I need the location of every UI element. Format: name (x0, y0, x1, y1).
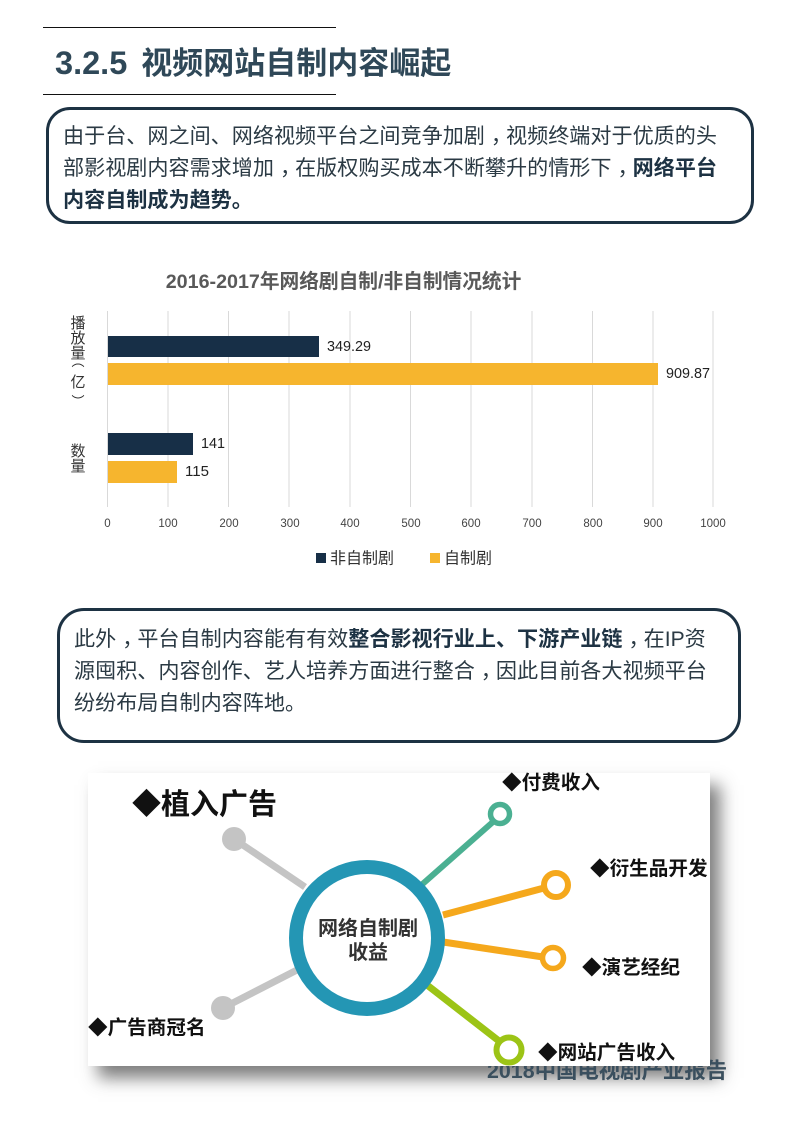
category label: quantity: 数 (70, 443, 86, 460)
callout: industry chain integration: 此外 ，平台自制内容能有有效整合影视行业上、下游产业链 ，在IP资 (74, 628, 706, 651)
central hub: 网络自制剧 (318, 916, 418, 940)
legend (316, 550, 492, 568)
revenue diagram (88, 771, 708, 1066)
bars: play count (108, 336, 710, 385)
callout: industry chain integration (57, 608, 741, 743)
branch: sponsor naming (88, 970, 297, 1039)
bars: quantity: 141 (201, 436, 225, 452)
bars: play count: 349.29 (327, 339, 371, 355)
legend: 自制剧 (444, 550, 492, 568)
x axis tick labels: 200 (219, 518, 239, 530)
central hub (296, 867, 438, 1009)
x axis tick labels: 400 (340, 518, 360, 530)
x axis tick labels: 900 (643, 518, 663, 530)
x axis tick labels: 500 (401, 518, 421, 530)
x axis tick labels: 600 (461, 518, 481, 530)
callout: industry chain integration: 源囤积、内容创作、艺人培养方面进行整合 ，因此目前各大视频平台 (74, 660, 707, 683)
x axis tick labels: 0 (104, 518, 111, 530)
x axis tick labels: 100 (158, 518, 178, 530)
branch: derivative products (443, 857, 708, 915)
category label: quantity (70, 443, 86, 475)
callout: self-produced content trend: 内容自制成为趋势。 (63, 189, 253, 212)
bars: quantity (108, 433, 225, 483)
category label: play count: ︵ (71, 354, 85, 369)
callout: self-produced content trend: 部影视剧内容需求增加 ，在版权购买成本不断攀升的情形下 ，网络平台 (63, 157, 717, 180)
x axis tick labels: 1000 (700, 518, 726, 530)
category label: quantity: 量 (70, 458, 86, 475)
x axis tick labels: 800 (583, 518, 603, 530)
legend: 非自制剧 (330, 550, 394, 568)
branch: derivative products: ◆衍生品开发 (590, 857, 708, 880)
x axis tick labels: 300 (280, 518, 300, 530)
category label: play count: 放 (70, 330, 86, 347)
x axis tick labels (104, 518, 726, 530)
category label: play count: 亿 (70, 374, 86, 391)
source caption: 2018中国电视剧产业报告 (487, 1059, 727, 1083)
callout: industry chain integration: 纷纷布局自制内容阵地。 (74, 692, 306, 715)
chart title: 2016-2017年网络剧自制/非自制情况统计 (166, 270, 522, 293)
revenue diagram panel (88, 773, 710, 1066)
branch: paid revenue (418, 771, 600, 888)
category label: play count: 量 (70, 345, 86, 362)
diagram drop shadow (88, 773, 710, 1066)
branch: product placement: ◆植入广告 (132, 788, 277, 821)
category label: play count: ︶ (71, 394, 85, 409)
category label: play count: 播 (70, 315, 86, 332)
branch: paid revenue: ◆付费收入 (502, 771, 600, 794)
x axis tick labels: 700 (522, 518, 542, 530)
branch: talent agency (443, 942, 680, 979)
category label: play count (70, 315, 86, 409)
branch: website ad revenue: ◆网站广告收入 (538, 1041, 676, 1064)
bar chart: 2016-2017 self-produced vs non-self-produced (70, 270, 726, 568)
branch: talent agency: ◆演艺经纪 (582, 956, 680, 979)
bars: play count: 909.87 (666, 366, 710, 382)
callout: self-produced content trend: 由于台、网之间、网络视频平台之间竞争加剧 ，视频终端对于优质的头 (63, 125, 717, 148)
heading: 3.2.5 视频网站自制内容崛起 (55, 45, 451, 81)
bars: quantity: 115 (185, 464, 209, 480)
branch: sponsor naming: ◆广告商冠名 (88, 1016, 206, 1039)
branch: product placement (132, 788, 305, 887)
branch: website ad revenue (427, 985, 676, 1064)
callout: self-produced content trend (46, 107, 754, 224)
central hub: 收益 (348, 941, 388, 964)
